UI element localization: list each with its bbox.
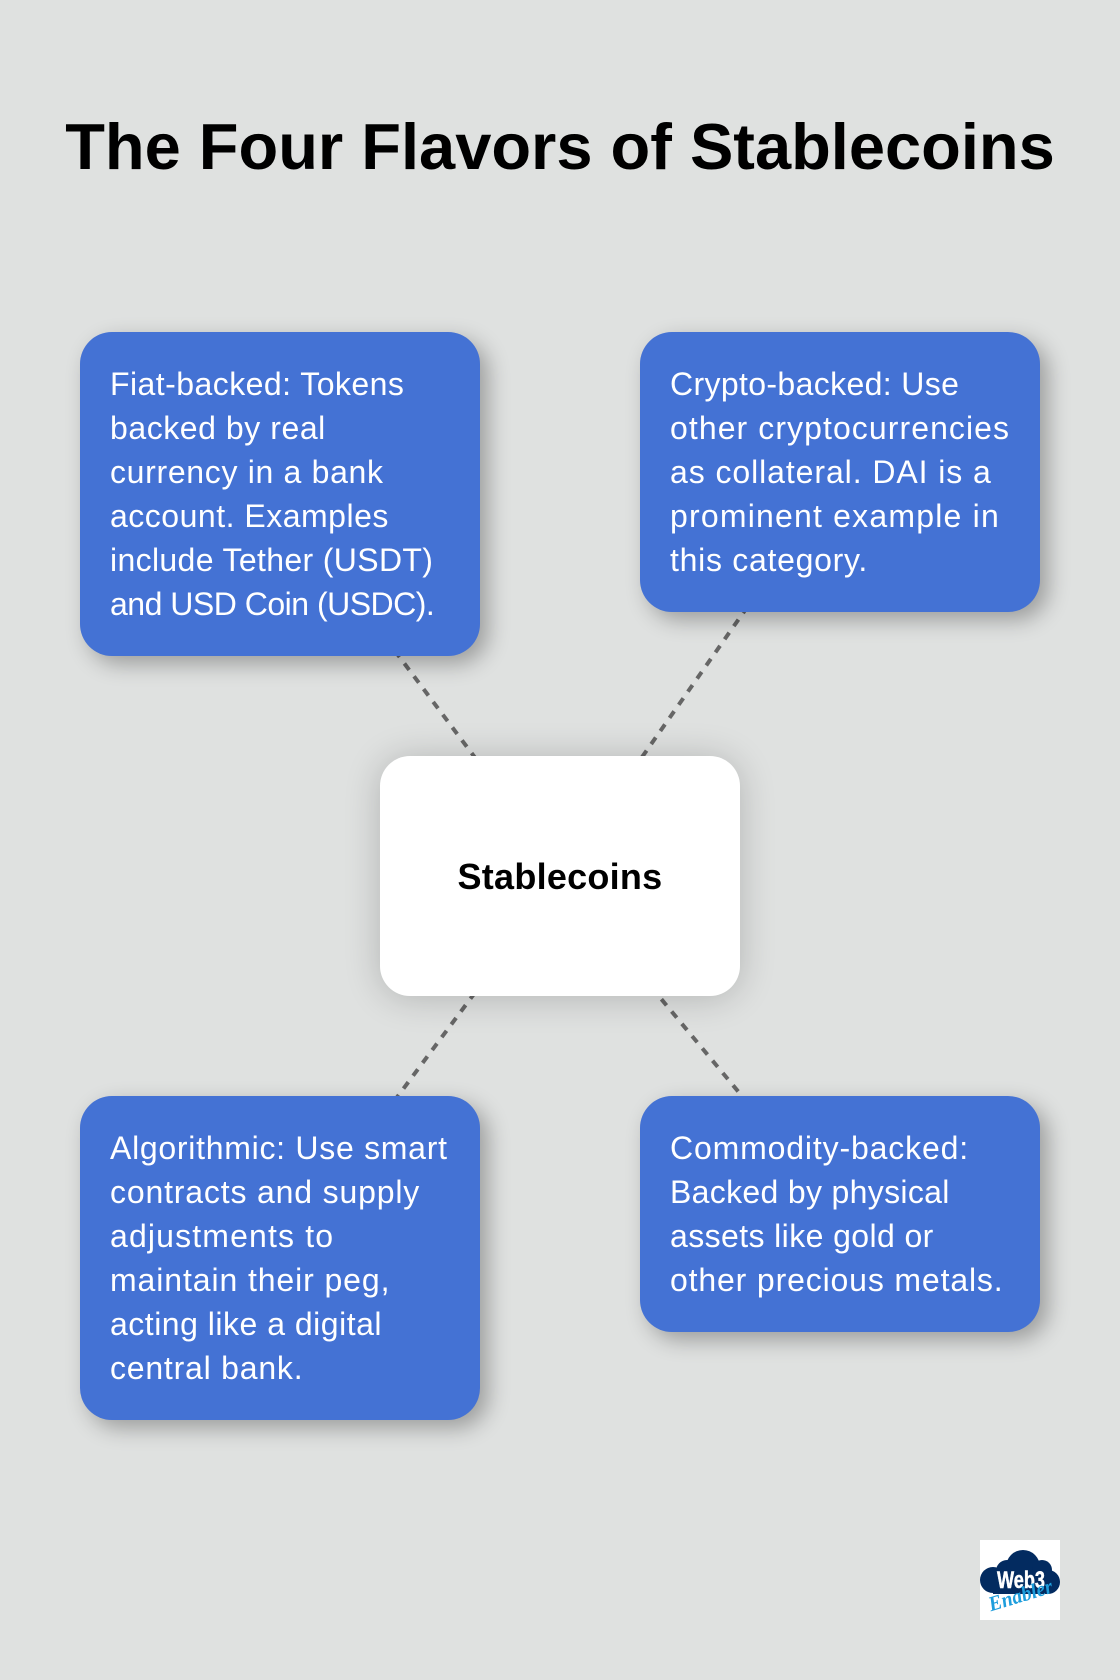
panel: algorithmic: maintain their peg, bbox=[110, 1262, 390, 1298]
panel: algorithmic: adjustments to bbox=[110, 1218, 334, 1254]
panel: commodity-backed: Commodity-backed: bbox=[670, 1130, 969, 1166]
panel: crypto-backed: other cryptocurrencies bbox=[670, 410, 1010, 446]
icon: web3 enabler logo bbox=[980, 1540, 1060, 1620]
center node: stablecoins: Stablecoins bbox=[458, 856, 662, 897]
panel: algorithmic: contracts and supply bbox=[110, 1174, 420, 1210]
panel: fiat-backed: currency in a bank bbox=[110, 454, 384, 490]
icon: web3 enabler logo: Web3 bbox=[997, 1567, 1045, 1594]
panel: crypto-backed bbox=[640, 332, 1040, 612]
panel: commodity-backed: Backed by physical bbox=[670, 1174, 950, 1210]
icon: web3 enabler logo: Enabler bbox=[984, 1574, 1056, 1616]
center node: stablecoins bbox=[380, 756, 740, 996]
panel: fiat-backed: include Tether (USDT) bbox=[110, 542, 433, 578]
panel: algorithmic: acting like a digital bbox=[110, 1306, 382, 1342]
panel: algorithmic: Algorithmic: Use smart bbox=[110, 1130, 448, 1166]
panel: fiat-backed bbox=[80, 332, 480, 656]
panel: algorithmic: central bank. bbox=[110, 1350, 303, 1386]
panel: crypto-backed: this category. bbox=[670, 542, 868, 578]
title: The Four Flavors of Stablecoins bbox=[65, 110, 1055, 183]
panel: commodity-backed: assets like gold or bbox=[670, 1218, 934, 1254]
panel: fiat-backed: account. Examples bbox=[110, 498, 389, 534]
panel: commodity-backed bbox=[640, 1096, 1040, 1332]
panel: fiat-backed: backed by real bbox=[110, 410, 326, 446]
panel: crypto-backed: as collateral. DAI is a bbox=[670, 454, 992, 490]
panel: commodity-backed: other precious metals. bbox=[670, 1262, 1004, 1298]
panel: fiat-backed: Fiat-backed: Tokens bbox=[110, 366, 404, 402]
panel: algorithmic bbox=[80, 1096, 480, 1420]
panel: fiat-backed: and USD Coin (USDC). bbox=[110, 586, 434, 622]
panel: crypto-backed: prominent example in bbox=[670, 498, 1000, 534]
panel: crypto-backed: Crypto-backed: Use bbox=[670, 366, 959, 402]
